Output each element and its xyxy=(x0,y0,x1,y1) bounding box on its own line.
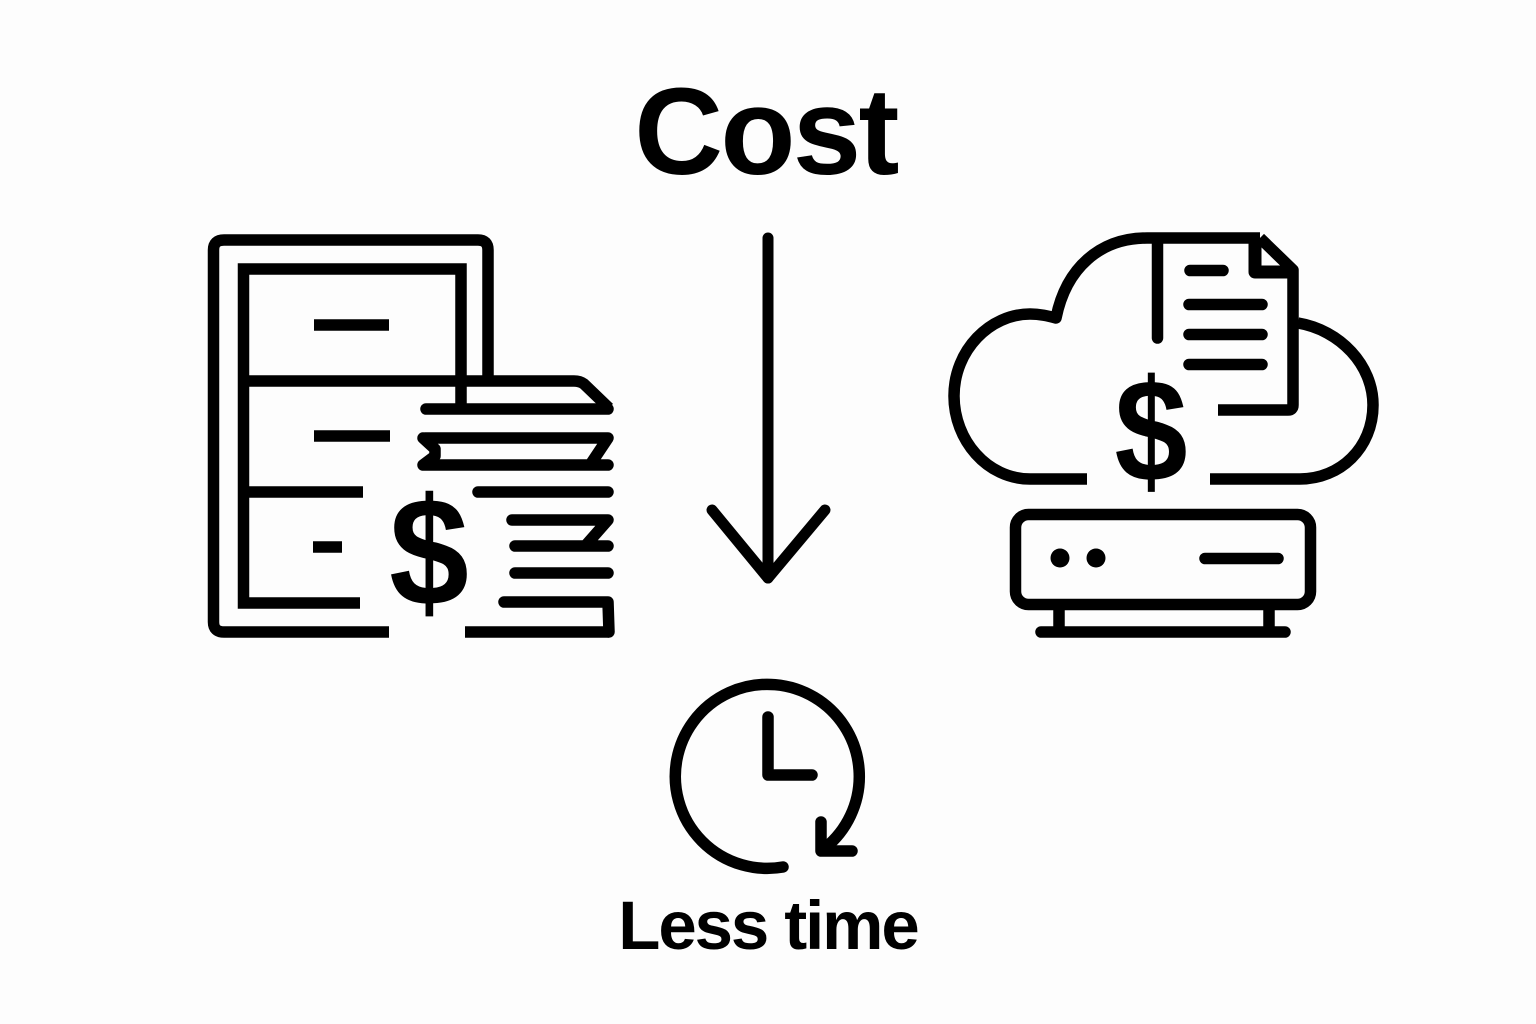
dollar sign: $ xyxy=(389,465,469,638)
title: Cost xyxy=(634,64,899,201)
server box xyxy=(1016,514,1310,604)
drawer handles xyxy=(313,325,390,547)
icon: cloud with document and dollar on server xyxy=(954,238,1373,632)
document fold xyxy=(1255,240,1290,272)
cloud outline right xyxy=(1210,323,1373,479)
arrow: cost goes down xyxy=(712,238,825,578)
icon: clock with arrow xyxy=(675,684,859,868)
label: less time: Less time xyxy=(618,887,918,964)
arrowhead xyxy=(821,822,852,851)
dollar sign: $ xyxy=(1114,350,1188,513)
stack bottom line xyxy=(465,626,609,638)
clock hands xyxy=(768,717,812,775)
cabinet outer frame xyxy=(214,240,488,632)
arrow shaft xyxy=(762,238,774,578)
clock circle arrow xyxy=(675,684,859,868)
drawer dividers xyxy=(243,381,609,408)
top sheet base xyxy=(426,403,608,415)
paper stack top sheet xyxy=(423,438,608,465)
document text lines xyxy=(1189,270,1262,364)
document left edge xyxy=(1152,240,1163,338)
server dots xyxy=(1050,548,1106,568)
icon: filing cabinet with paper stack and dollar xyxy=(214,240,609,638)
paper stack lines xyxy=(478,492,609,632)
lower divider xyxy=(243,486,363,498)
arrow head xyxy=(712,510,825,578)
cloud outline left xyxy=(954,238,1260,479)
document outline xyxy=(1218,238,1293,410)
server stand xyxy=(1041,609,1285,632)
cabinet inner frame xyxy=(244,269,461,603)
server slot xyxy=(1205,553,1278,564)
